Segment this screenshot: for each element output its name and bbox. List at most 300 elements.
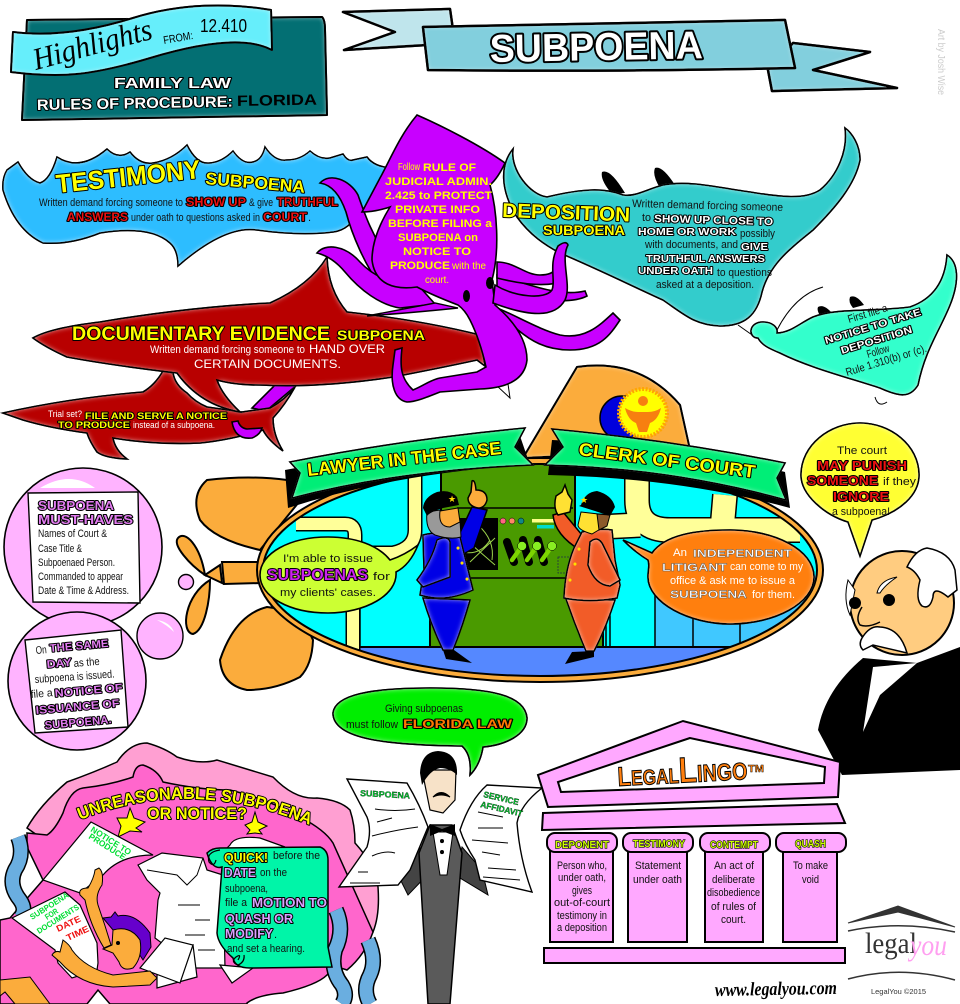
title ribbon (343, 9, 897, 91)
bubble (4, 468, 162, 626)
under oath: UNDER OATH (638, 265, 713, 277)
artist credit: Art by Josh Wise (935, 29, 946, 95)
ring outline (263, 464, 817, 676)
foot (565, 651, 594, 664)
note line five: Date & Time & Address. (38, 585, 129, 597)
floor (360, 646, 730, 675)
legal lingo title: LEGALLINGO (616, 746, 748, 794)
subpoena: SUBPOENA (670, 589, 747, 601)
hair (597, 514, 610, 530)
subpoena comma: subpoena, (225, 883, 268, 895)
thin right tentacle (497, 275, 587, 301)
propeller hub (205, 565, 222, 583)
note line one: Names of Court & (38, 528, 108, 540)
propeller shaft (222, 562, 262, 584)
hand (555, 485, 572, 515)
legalyou logo (848, 906, 955, 996)
paper below scroll (220, 965, 253, 983)
modify: MODIFY (225, 926, 273, 941)
sun emblem (619, 389, 667, 437)
rule reference: Rule 1.310(b) or (c). (844, 343, 928, 379)
answers: ANSWERS (67, 212, 128, 224)
give: GIVE (741, 241, 768, 253)
column: deponent (547, 833, 617, 942)
the same: THE SAME (49, 638, 109, 655)
speech bubble: clerk (623, 530, 814, 624)
banner (545, 429, 786, 500)
swimmer (0, 868, 157, 1004)
date: DATE (224, 865, 256, 880)
character: judge (818, 548, 960, 775)
small manta body (751, 255, 956, 395)
show up close to: SHOW UP CLOSE TO (654, 213, 773, 228)
arm (553, 512, 582, 550)
an: An (673, 547, 687, 559)
panel: testimony wave (3, 145, 395, 266)
before the: before the (273, 850, 320, 862)
definition line two: under oath to questions asked in (131, 212, 260, 224)
top right tentacle (497, 262, 565, 285)
manta body (504, 128, 860, 326)
private info text: PRIVATE INFO (395, 204, 480, 216)
coat (564, 529, 620, 600)
right ribbon tail (768, 43, 897, 91)
illustration: purple squid (317, 115, 620, 402)
bubble line one: Giving subpoenas (385, 703, 463, 715)
from label: FROM: (162, 30, 194, 47)
shirt studs (440, 841, 444, 852)
interior cyan windows (266, 474, 816, 646)
right paper lines (472, 812, 520, 880)
litigant: LITIGANT (662, 562, 727, 574)
home or work: HOME OR WORK (638, 226, 736, 238)
illustration: submarine (177, 366, 830, 690)
to questions: to questions (717, 267, 772, 279)
left paper label: SUBPOENA (360, 788, 410, 801)
column: deponent: a deposition (557, 922, 607, 934)
column: contempt: disobedience (707, 887, 760, 899)
documentary evidence heading: DOCUMENTARY EVIDENCE (72, 324, 330, 345)
banner: lawyer in the case (285, 428, 533, 508)
notice to produce paper (43, 822, 153, 893)
notice label: NOTICE TO (89, 824, 134, 857)
to produce: TO PRODUCE (58, 420, 130, 431)
and set a hearing: and set a hearing. (227, 943, 305, 955)
green control wall (430, 450, 603, 648)
hand over: HAND OVER (309, 342, 385, 356)
front paper (140, 938, 193, 983)
panel: documentary evidence shark (33, 257, 485, 412)
definition line one: Written demand forcing someone to (39, 197, 183, 209)
motion to: MOTION TO (252, 895, 327, 910)
column: contempt (700, 833, 770, 942)
time label: TIME (65, 924, 91, 943)
a subpoena: a subpoena! (832, 506, 890, 518)
florida heading: FLORIDA (237, 92, 317, 110)
subpoena label: SUBPOENA (28, 891, 71, 922)
character: left captain (417, 481, 487, 663)
right pipe outline (600, 470, 800, 530)
florida law: FLORIDA LAW (403, 717, 513, 731)
note line three: Subpoenaed Person. (38, 557, 115, 569)
testimony text (39, 154, 338, 224)
radar lines (466, 528, 496, 566)
judicial admin text: JUDICIAL ADMIN. (385, 176, 492, 188)
hooked right tentacle (493, 243, 568, 314)
column: contempt: CONTEMPT (710, 840, 758, 851)
lawyer line one: I'm able to issue (283, 553, 373, 565)
suit sleeves (398, 847, 488, 895)
left pipe fill (296, 470, 415, 650)
subpoena subheading: SUBPOENA (205, 169, 306, 197)
front paper back sheet (157, 945, 197, 988)
rule number: 12.410 (200, 16, 247, 36)
temple base (544, 948, 845, 963)
certain documents: CERTAIN DOCUMENTS. (194, 357, 341, 371)
hair (420, 751, 457, 785)
buttons (458, 548, 467, 579)
file a: file a (225, 897, 248, 909)
logo you: you (907, 929, 947, 962)
logo roof arcs (848, 926, 955, 980)
for label: FOR (43, 907, 60, 922)
coat arm (417, 538, 450, 587)
bubble shape (801, 423, 919, 556)
small manta fins (818, 296, 864, 320)
asked at a deposition: asked at a deposition. (656, 279, 754, 291)
bubble shape (623, 530, 814, 624)
legs (423, 598, 470, 650)
hat (423, 491, 459, 516)
banner (290, 428, 533, 498)
tentacle wedge (367, 303, 458, 316)
main ribbon (423, 20, 795, 71)
column: contempt: An act of (714, 860, 755, 872)
legs (566, 599, 615, 651)
line one: Written demand forcing someone (632, 198, 783, 214)
issuance of: ISSUANCE OF (35, 698, 120, 717)
speech bubble: florida law (333, 688, 527, 775)
scroll (207, 847, 332, 968)
eyes (849, 594, 895, 609)
sub lower fin (220, 607, 313, 690)
tail line (738, 325, 755, 337)
deposition subpoena word: SUBPOENA (543, 222, 625, 238)
levers (507, 540, 556, 562)
column: testimony: under oath (633, 874, 682, 886)
squid tooth (497, 384, 510, 398)
console panel lines (441, 508, 573, 578)
file and serve: FILE AND SERVE A NOTICE (85, 411, 227, 422)
face (440, 508, 460, 527)
bow tie (430, 824, 455, 836)
column: contempt: deliberate (712, 874, 755, 886)
testimony heading: TESTIMONY (54, 154, 202, 199)
panel: legal lingo temple (538, 721, 846, 963)
face (578, 512, 607, 534)
air bubbles (137, 574, 194, 659)
bubble shape (260, 537, 418, 613)
on the: on the (260, 867, 287, 879)
raised arm (80, 868, 111, 948)
nose (858, 607, 880, 626)
ear (846, 580, 855, 615)
upper papers (225, 837, 285, 850)
may punish: MAY PUNISH (817, 458, 907, 473)
manta cephalic fins (602, 168, 675, 194)
produce with the text: PRODUCE (390, 260, 450, 272)
notice of: NOTICE OF (54, 682, 123, 700)
bubble line two: must follow (346, 719, 398, 731)
small manta tail (777, 287, 887, 404)
wall dividers (360, 596, 741, 646)
court: COURT (263, 212, 307, 224)
panel: notice to produce shark (3, 371, 295, 459)
shark subpoena word: SUBPOENA (337, 327, 425, 343)
rule of text: RULE OF (423, 162, 476, 174)
date label: DATE (55, 914, 82, 934)
title text: SUBPOENA (489, 24, 703, 71)
lower right wall panel (656, 575, 816, 646)
note line four: Commanded to appear (38, 571, 123, 583)
propeller blades (177, 536, 210, 634)
speech bubble: lawyer (260, 537, 418, 613)
deposition text (502, 198, 783, 291)
the court: The court (837, 445, 887, 457)
first file a: First file a (846, 302, 890, 326)
court text: court. (425, 275, 449, 286)
hat (579, 491, 615, 516)
column: testimony: Statement (635, 860, 681, 872)
illustration: purple tentacle behind sharks (252, 385, 297, 411)
note line two: Case Title & (38, 543, 82, 555)
before filing text: BEFORE FILING a (388, 218, 493, 230)
column: deponent: out-of-court (554, 897, 610, 909)
star right (245, 812, 267, 834)
squid mantle, head and lower tentacle (362, 115, 527, 402)
website url: www.legalyou.com (715, 978, 837, 1001)
instead of a subpoena: instead of a subpoena. (133, 420, 215, 430)
panel: deposition manta ray (504, 128, 956, 404)
banner: clerk of court (545, 429, 790, 508)
hair (907, 548, 957, 607)
inner reef (0, 765, 373, 1004)
subpoena on text: SUBPOENA on (398, 232, 478, 244)
column: deponent: under oath, (558, 872, 606, 884)
beard (427, 510, 461, 538)
shirt (433, 832, 453, 875)
to: to (642, 212, 651, 224)
radar screen (460, 518, 498, 570)
on: On (35, 644, 47, 657)
truthful: TRUTHFUL (277, 197, 338, 209)
trademark: TM (748, 764, 764, 775)
mustache (860, 627, 907, 653)
if they: if they (883, 476, 917, 488)
banner text: LAWYER IN THE CASE (306, 438, 502, 480)
raised arm (458, 507, 487, 555)
notice to take: NOTICE TO TAKE (824, 307, 923, 347)
brow (877, 577, 897, 593)
banner text: CLERK OF COURT (577, 439, 757, 482)
suit (419, 825, 462, 1004)
pediment (538, 721, 840, 807)
feet (443, 650, 472, 663)
for them: for them. (752, 589, 795, 601)
left paper (339, 779, 428, 887)
column: quash (776, 833, 846, 942)
family law heading: FAMILY LAW (114, 75, 232, 92)
someone: SOMEONE (807, 473, 878, 488)
show up: SHOW UP (186, 197, 246, 209)
and give: & give (249, 197, 273, 209)
header: highlights panel (11, 5, 327, 120)
column: deponent: testimony in (557, 910, 607, 922)
day: DAY (46, 657, 73, 671)
big shark body (33, 257, 485, 412)
hat star: ★ (448, 494, 456, 504)
panel: same day bubble (8, 612, 146, 750)
sub upper fin (196, 478, 303, 550)
column: quash: To make (793, 860, 828, 872)
column: contempt: of rules of (711, 901, 757, 913)
squid text (385, 162, 493, 286)
note paper (25, 630, 128, 733)
panel: unreasonable subpoena reef (0, 742, 382, 1004)
buttons (570, 549, 579, 580)
independent: INDEPENDENT (693, 548, 792, 560)
left pipe outline (296, 470, 415, 650)
small manta text (824, 302, 928, 379)
eye (116, 941, 120, 945)
coat (420, 533, 473, 598)
period: . (308, 212, 311, 224)
lower arm (52, 940, 157, 987)
pediment window (558, 738, 825, 792)
outer reef (27, 743, 378, 968)
follow: Follow (865, 343, 891, 361)
deposition: DEPOSITION (840, 325, 914, 357)
subpoena paper (12, 892, 98, 978)
affidavit label: AFFIDAVIT (480, 799, 524, 819)
leg (0, 977, 50, 1004)
reef heading one: UNREASONABLE SUBPOENA (76, 786, 311, 826)
scroll curls (208, 850, 244, 965)
logo copyright: LegalYou ©2015 (871, 987, 926, 996)
coat arm (588, 539, 620, 586)
right pipe fill (600, 470, 800, 530)
truthful answers: TRUTHFUL ANSWERS (646, 253, 765, 265)
column: quash: void (802, 874, 819, 886)
trial set: Trial set? (48, 409, 82, 419)
quash or: QUASH OR (225, 911, 294, 926)
subpoena: SUBPOENA. (44, 714, 112, 732)
with documents, and: with documents, and (644, 239, 738, 251)
speech bubble: judge (801, 423, 919, 556)
shirt (863, 663, 917, 732)
hair (103, 912, 151, 960)
conning tower (523, 366, 690, 458)
banner shadow (548, 440, 790, 508)
note paper (28, 492, 140, 603)
interior (266, 465, 816, 675)
possibly: possibly (740, 228, 775, 240)
follow text: Follow (398, 162, 421, 173)
left paper lines (350, 809, 418, 883)
face (103, 929, 141, 969)
indicator lights (500, 518, 554, 528)
jacket (818, 647, 960, 775)
seaweed (12, 837, 373, 1004)
left ribbon tail (343, 9, 453, 50)
lower right tentacle (497, 308, 620, 350)
column: testimony: TESTIMONY (633, 839, 685, 850)
column: deponent: Person who, (557, 860, 607, 872)
as the: as the (73, 656, 100, 670)
hat star: ★ (580, 495, 588, 505)
highlights script word: Highlights (28, 11, 156, 77)
middle left tentacle (317, 247, 435, 308)
with the text: with the (451, 261, 486, 272)
rules of procedure heading: RULES OF PROCEDURE: (37, 94, 233, 114)
highlights ribbon (11, 5, 272, 75)
my clients cases: my clients' cases. (280, 587, 376, 599)
office and ask: office & ask me to issue a (670, 575, 796, 587)
note heading two: MUST-HAVES (38, 512, 133, 527)
shark definition: Written demand forcing someone to (150, 344, 305, 356)
right paper (460, 785, 542, 892)
tentacle curl (232, 421, 262, 438)
character: right captain (553, 485, 620, 664)
banner shadow (285, 436, 530, 508)
logo legal: legal (865, 927, 917, 960)
period: . (274, 929, 277, 941)
ring of hull (257, 458, 823, 682)
documents label: DOCUMENTS (35, 902, 81, 936)
subpoenas: SUBPOENAS (267, 567, 368, 584)
stack lines (147, 858, 215, 950)
blue porthole (600, 396, 644, 440)
character: standing lawyer (339, 751, 542, 1004)
quick: QUICK! (224, 850, 268, 865)
logo roof (848, 906, 955, 927)
small shark body (3, 371, 295, 459)
column: deponent: gives (572, 885, 592, 897)
2.425 to protect text: 2.425 to PROTECT (385, 190, 492, 202)
notice to text: NOTICE TO (403, 246, 471, 258)
ignore: IGNORE (833, 489, 889, 504)
file a: file a (30, 687, 54, 701)
teal header box (22, 17, 327, 120)
bubble highlight (40, 479, 95, 488)
star left (117, 808, 145, 837)
column: testimony (623, 833, 693, 942)
bubble (8, 612, 146, 750)
subpoena is issued: subpoena is issued. (34, 668, 115, 686)
deposition heading: DEPOSITION (502, 200, 631, 226)
column: quash: QUASH (795, 839, 826, 850)
hand (468, 481, 487, 508)
panel: must-haves bubble (4, 468, 162, 626)
produce label: PRODUCE (87, 831, 128, 862)
face (422, 770, 456, 813)
note heading one: SUBPOENA (38, 498, 115, 513)
mesh basket (558, 556, 569, 574)
mustache (433, 792, 450, 797)
head (850, 551, 954, 655)
squid eyes (463, 277, 494, 302)
reef heading two: OR NOTICE? (147, 804, 247, 823)
